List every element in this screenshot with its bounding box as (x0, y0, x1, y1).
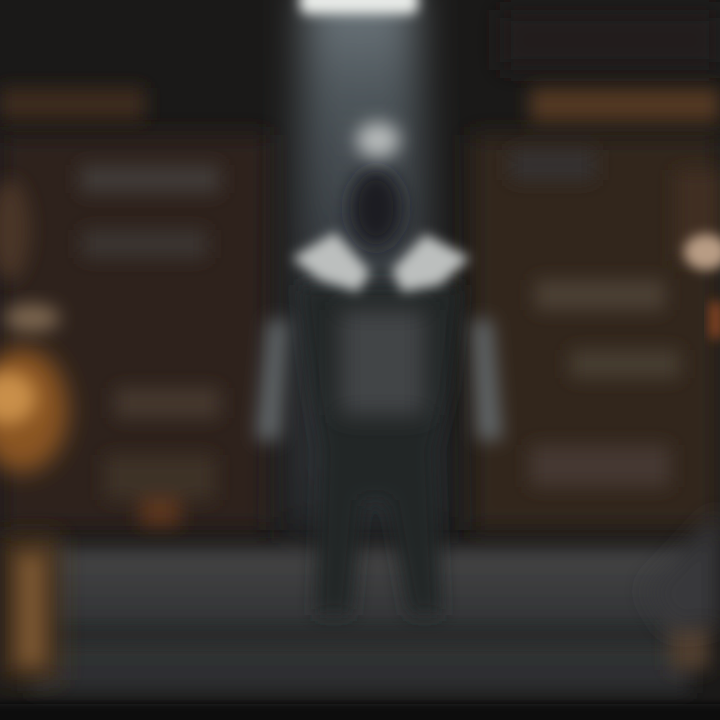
figure: torso highlight (340, 310, 425, 415)
figure: right shoulder (392, 234, 470, 292)
floor (0, 535, 710, 693)
panel: left wall shelves (0, 88, 220, 526)
left orange glow (0, 180, 68, 472)
ceiling lamp (300, 0, 418, 14)
panel: right wall shelves (510, 88, 720, 487)
figure: head highlight (356, 122, 400, 158)
right foreground figure (645, 510, 720, 630)
central light beam (285, 0, 445, 530)
figure: body (298, 285, 462, 615)
figure: left arm (256, 320, 288, 440)
central figure (256, 122, 502, 615)
figure: right arm (472, 320, 502, 440)
figure: left shoulder (292, 232, 370, 292)
figure: neck and head shadow (350, 170, 402, 246)
bottom dark band (0, 704, 720, 720)
right lamp glow (684, 234, 720, 338)
